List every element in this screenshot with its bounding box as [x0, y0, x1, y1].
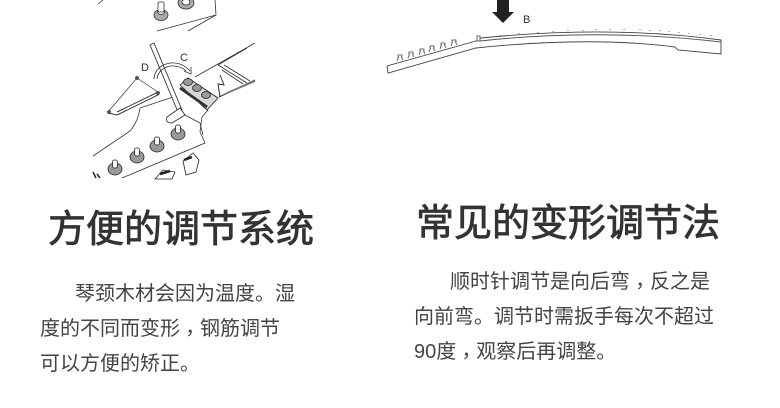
- text block: right: 90度，观察后再调整。: [414, 340, 616, 369]
- text block: left: [40, 283, 295, 375]
- text block: left: 琴颈木材会因为温度。湿: [75, 283, 295, 305]
- text block: right: 向前弯。调节时需扳手每次不超过: [414, 306, 714, 328]
- label B: B: [523, 14, 530, 26]
- label D: D: [141, 62, 149, 74]
- label C: C: [180, 52, 188, 64]
- triangular truss rod cover D: [108, 76, 160, 115]
- lower headstock outline: [93, 43, 255, 178]
- down arrow: [492, 0, 514, 23]
- heading: left: 方便的调节系统: [48, 209, 314, 251]
- nut and tuners: [397, 36, 480, 61]
- frets: [500, 29, 711, 36]
- text block: right: [414, 270, 714, 369]
- tuning pegs: [93, 125, 199, 179]
- neck profile: [387, 32, 721, 73]
- text block: left: 度的不同而变形，钢筋调节: [40, 317, 280, 346]
- upper headstock fragment: [98, 0, 216, 31]
- illustration: guitar headstock truss rod adjustment: [92, 0, 256, 180]
- text block: right: 顺时针调节是向后弯，反之是: [450, 270, 710, 299]
- text block: left: 可以方便的矫正。: [40, 353, 200, 375]
- illustration: curved guitar neck: [386, 0, 722, 74]
- allen key and socket: [150, 43, 185, 123]
- rotation arrow C: [154, 63, 191, 79]
- locking nut: [180, 78, 218, 110]
- heading: right: 常见的变形调节法: [416, 203, 720, 245]
